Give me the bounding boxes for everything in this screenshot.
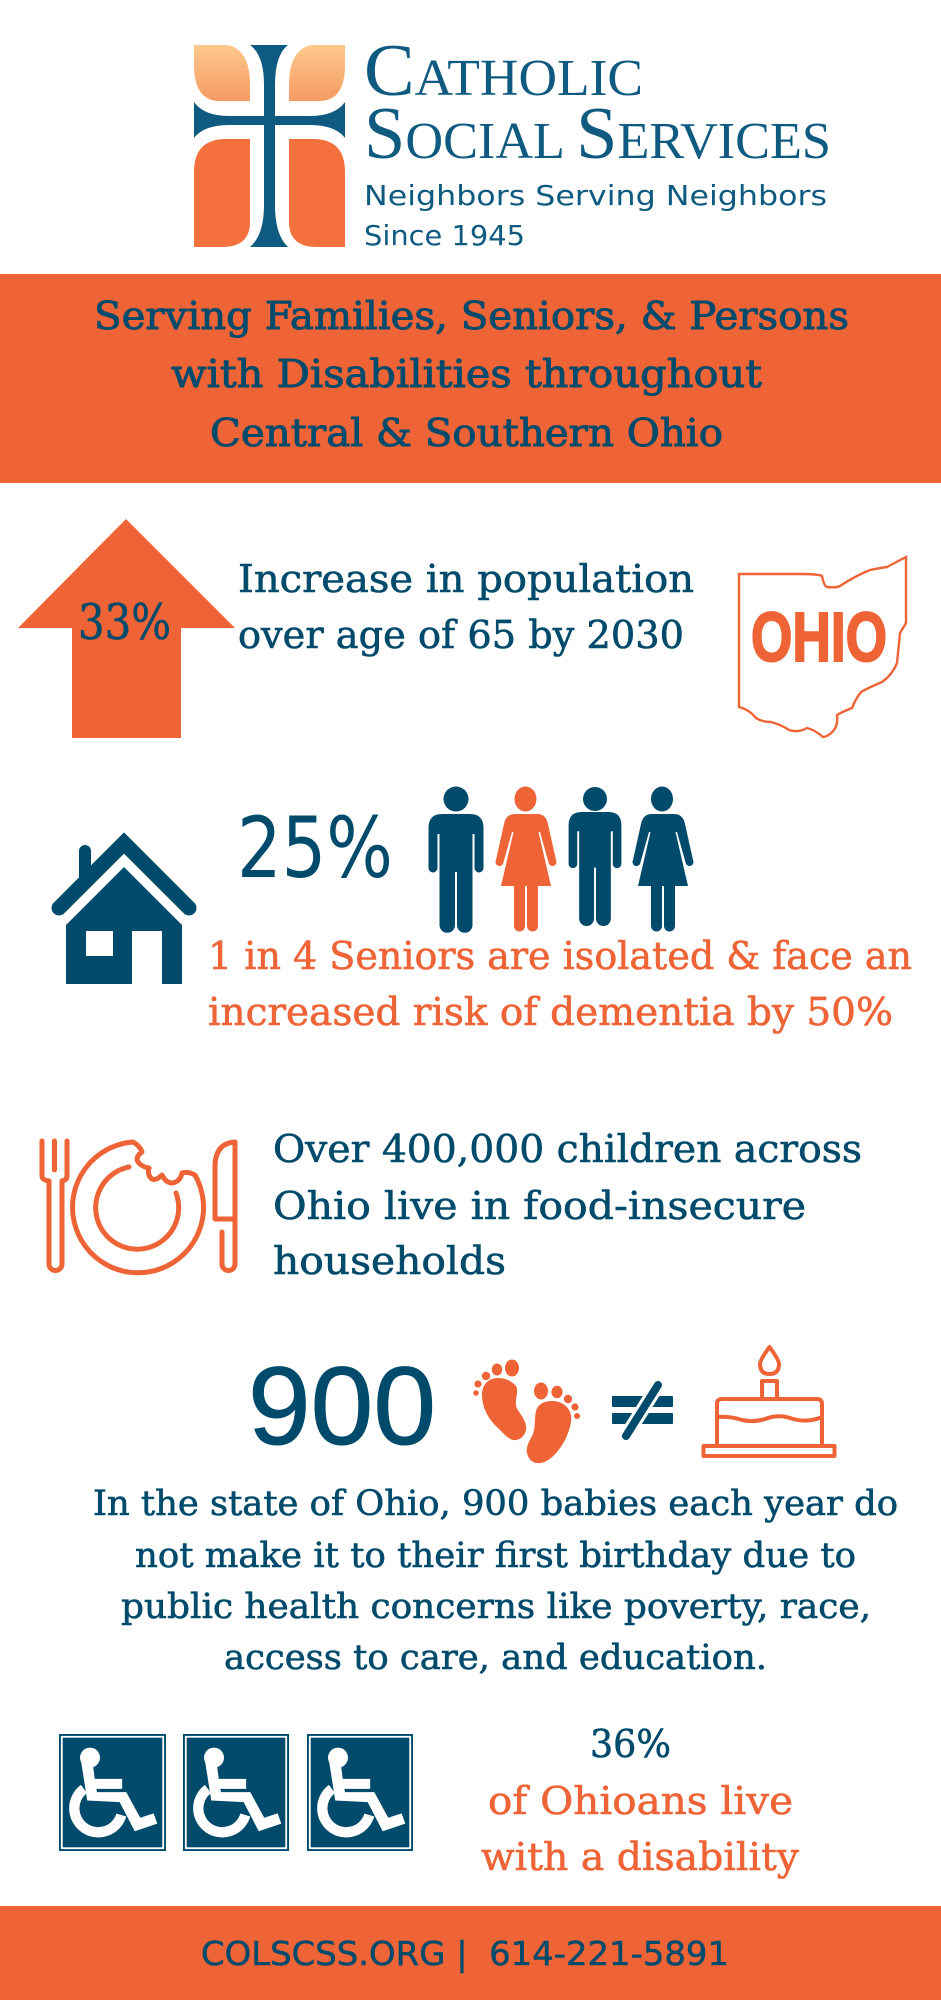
banner heading: [94, 294, 849, 455]
text: population statistic: [238, 557, 694, 657]
arrow: 33% up: 33%: [78, 594, 171, 651]
icon: logo cross with leaves: [194, 45, 345, 247]
icon: baby feet: [473, 1360, 580, 1463]
section: isolated seniors: [59, 786, 912, 1034]
banner heading: Serving Families, Seniors, & Persons: [94, 294, 849, 338]
logo name: SOCIAL SERVICES: [364, 93, 831, 175]
icon: wheelchair sign 1: [59, 1734, 166, 1851]
text: infant mortality paragraph: public health concerns like poverty, race,: [121, 1587, 871, 1627]
icon: not equal sign: [612, 1385, 673, 1436]
text: disability statistic: [481, 1722, 800, 1879]
section: food insecurity: [42, 1127, 862, 1283]
banner heading: Central & Southern Ohio: [210, 411, 723, 455]
icon: wheelchair sign 2: [183, 1734, 289, 1851]
stat: 25%: 25%: [237, 799, 393, 897]
text: food insecurity statistic: [273, 1127, 862, 1283]
text: disability statistic: of Ohioans live: [488, 1779, 793, 1823]
text: infant mortality paragraph: access to care, and education.: [224, 1638, 767, 1678]
icon: house: [59, 843, 189, 984]
banner heading: with Disabilities throughout: [171, 352, 762, 396]
text: infant mortality paragraph: In the state of Ohio, 900 babies each year do: [93, 1484, 898, 1524]
icon: birthday cake: [704, 1347, 834, 1456]
icon: Ohio map: OHIO: [751, 598, 887, 676]
text: isolation statistic: 1 in 4 Seniors are isolated & face an: [208, 934, 912, 978]
text: food insecurity statistic: households: [273, 1239, 506, 1283]
footer contact text: COLSCSS.ORG | 614-221-5891: [201, 1934, 729, 1973]
icon: plate with bite, fork and knife: [42, 1141, 235, 1273]
text: infant mortality paragraph: not make it to their first birthday due to: [135, 1536, 856, 1576]
icon: Ohio map: [739, 557, 906, 737]
logo tagline: Since 1945: [364, 219, 525, 252]
text: disability statistic: with a disability: [481, 1835, 800, 1879]
text: infant mortality paragraph: [93, 1484, 898, 1678]
text: population statistic: Increase in population: [238, 557, 694, 601]
text: isolation statistic: increased risk of dementia by 50%: [208, 990, 893, 1034]
text: isolation statistic: [208, 934, 912, 1034]
logo tagline: [364, 179, 827, 252]
logo name: [364, 30, 831, 175]
text: food insecurity statistic: Over 400,000 children across: [273, 1127, 862, 1171]
banner: [0, 274, 941, 483]
text: population statistic: over age of 65 by 2030: [238, 613, 684, 657]
logo tagline: Neighbors Serving Neighbors: [364, 179, 827, 212]
logo name: CATHOLIC: [364, 30, 643, 112]
text: food insecurity statistic: Ohio live in food-insecure: [273, 1184, 806, 1228]
icon: wheelchair sign 3: [307, 1734, 413, 1851]
text: disability statistic: 36%: [590, 1722, 671, 1766]
arrow: 33% up: [18, 519, 235, 738]
section: infant mortality: [93, 1345, 898, 1678]
section: population increase: [18, 519, 906, 738]
icon: four people: [428, 786, 694, 933]
footer: [0, 1906, 941, 2000]
stat: 900: 900: [248, 1345, 436, 1468]
header logo: [194, 30, 831, 252]
section: disability: [59, 1722, 800, 1879]
